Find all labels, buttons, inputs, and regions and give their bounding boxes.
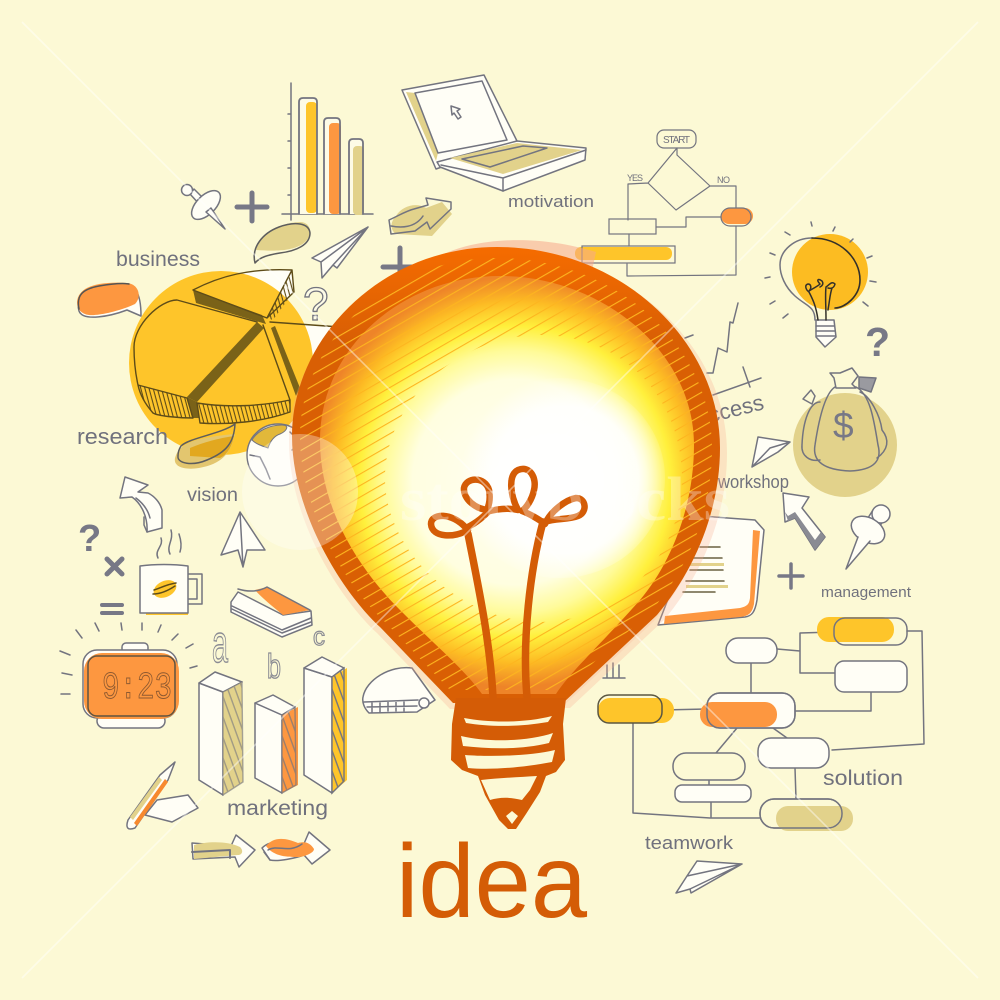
arrow: 3d top	[389, 198, 452, 236]
watermark logo	[242, 434, 730, 550]
bar chart: a b c: c	[313, 621, 325, 651]
flowchart: start: START	[663, 135, 690, 146]
label: workshop: workshop	[717, 472, 789, 492]
label: management: management	[821, 584, 912, 601]
label: vision: vision	[187, 485, 238, 506]
label: motivation: motivation	[508, 192, 594, 211]
icon: money bag	[793, 368, 897, 497]
icon: alarm clock: 9:23	[102, 667, 172, 710]
arrow: curved left	[120, 477, 162, 532]
arrow: orange	[262, 832, 330, 864]
paper plane: bottom	[676, 861, 742, 893]
flowchart: start: NO	[717, 175, 730, 185]
icon: alarm clock	[60, 623, 197, 728]
label: business: business	[116, 248, 200, 271]
small bars behind bulb	[603, 663, 625, 678]
flowchart: start	[575, 130, 753, 276]
icon: notebook	[658, 516, 764, 625]
icon: plus behind bulb	[383, 248, 423, 280]
bar chart: a b c: b	[267, 648, 281, 686]
question mark: left: ?	[78, 518, 101, 560]
icon: small lightbulb	[765, 222, 876, 347]
icon: times	[107, 559, 122, 574]
label: solution: solution	[823, 767, 903, 790]
bar chart: top	[282, 83, 373, 220]
icon: book stack	[231, 587, 312, 637]
icon: equals	[102, 605, 122, 613]
question mark: left of bulb: ?	[303, 278, 329, 330]
flowchart: start: YES	[627, 173, 643, 183]
bulb base	[451, 698, 566, 829]
title: idea: idea	[396, 824, 587, 940]
icon: laptop	[402, 75, 586, 191]
arrow: right up	[783, 493, 825, 550]
question mark: right: ?	[865, 319, 890, 365]
filament	[431, 469, 585, 697]
label: research: research	[77, 424, 168, 449]
bulb white core	[455, 378, 665, 578]
icon: plus	[237, 193, 267, 221]
icon: globe	[247, 424, 309, 486]
bulb glass	[292, 247, 720, 703]
arrow: tan	[192, 835, 255, 867]
speech bubble: tan lower	[175, 424, 235, 469]
icon: push pin right	[846, 505, 890, 569]
label: teamwork: teamwork	[645, 833, 734, 853]
pie chart	[134, 270, 340, 424]
speech bubble: tan	[254, 222, 310, 263]
main lightbulb	[289, 240, 727, 829]
watermark logo: storyblocks	[400, 466, 730, 534]
speech bubble: orange	[77, 283, 141, 317]
bulb hatch lines	[300, 258, 712, 690]
paper plane: center left	[221, 512, 265, 567]
bulb glow	[320, 276, 694, 694]
bar chart: a b c	[199, 614, 347, 795]
pie chart circle	[129, 271, 313, 455]
label: success: success	[683, 390, 766, 433]
bulb halo	[289, 240, 727, 709]
flowchart: solution	[598, 617, 924, 831]
line chart: success	[685, 303, 761, 395]
icon: push pin	[182, 184, 225, 229]
bar chart: a b c: a	[212, 614, 229, 674]
icon: money bag: $	[833, 405, 854, 446]
paper plane: top	[312, 227, 368, 278]
icon: coffee mug	[140, 530, 202, 615]
pie chart: white wedges behind circle	[193, 270, 340, 420]
icon: pencil and eraser	[127, 762, 198, 829]
paper plane: right	[752, 437, 790, 467]
icon: plus right	[779, 564, 803, 588]
label: marketing: marketing	[227, 797, 328, 820]
icon: compass behind bulb	[363, 668, 435, 713]
